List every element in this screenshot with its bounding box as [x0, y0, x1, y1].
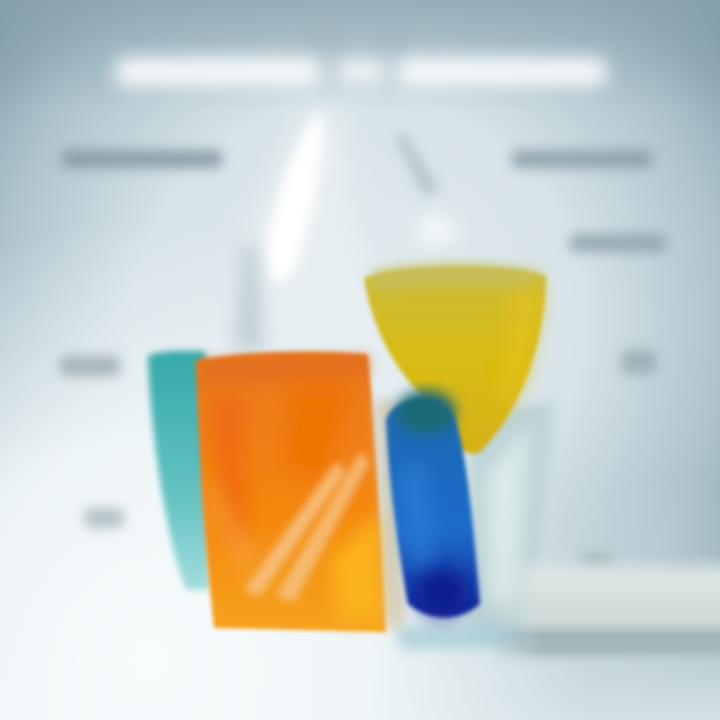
text label: left middle: [60, 356, 120, 376]
text label: right upper: [570, 234, 666, 252]
blue glass: [386, 390, 480, 618]
text label: top left: [62, 150, 222, 168]
text label: top right: [512, 150, 652, 168]
clear bottle: [234, 108, 456, 360]
orange glass: [196, 352, 386, 632]
clear glass behind blue: [396, 402, 554, 650]
title: [116, 58, 606, 86]
bottle neck at top: [308, 2, 406, 46]
text label: right middle: [622, 350, 656, 374]
table reflection: [500, 558, 720, 662]
teal glass: [148, 351, 210, 590]
yellow wine glass: [364, 264, 546, 454]
glass gap: [374, 400, 404, 628]
text label: left lower: [84, 508, 124, 528]
text label: right lower: [582, 554, 612, 568]
